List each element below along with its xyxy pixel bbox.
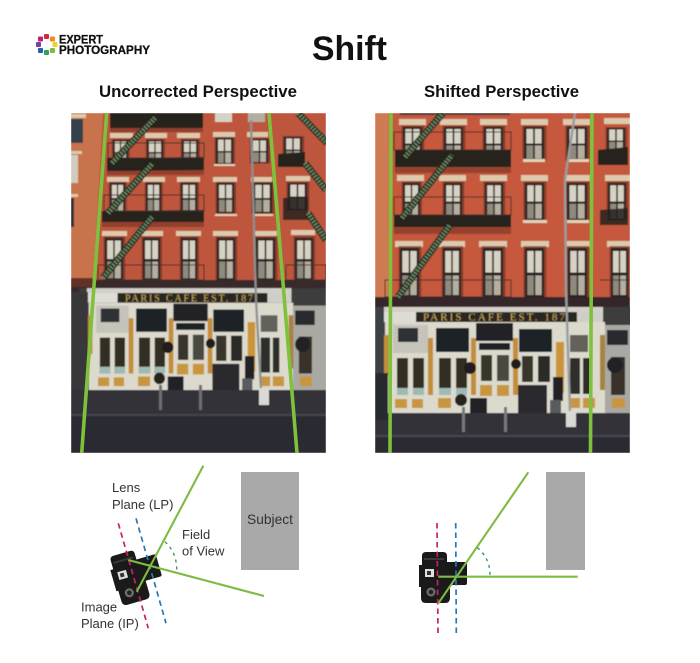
image plane dashed line: [118, 523, 148, 628]
icon: colour ring: [36, 34, 58, 55]
heading: uncorrected perspective: Uncorrected Perspective: [99, 82, 297, 101]
panel: uncorrected photo of Paris Cafe building: [71, 113, 327, 453]
image plane dashed line: [437, 523, 438, 633]
icon: tilted camera: [107, 544, 167, 607]
diagram: uncorrected camera setup: [81, 466, 299, 631]
label: lens plane: Plane (LP): [112, 497, 173, 512]
logo wordmark: [59, 32, 150, 57]
icon: straight camera: [419, 552, 467, 603]
field of view lines: [128, 466, 264, 596]
logo wordmark: PHOTOGRAPHY: [59, 43, 150, 57]
field of view arc: [165, 542, 177, 570]
lens plane dashed line: [455, 523, 457, 633]
perspective guide: parallel green lines: [390, 113, 592, 453]
label: field of view: Field: [182, 527, 210, 542]
field of view lines: [438, 472, 578, 603]
panel: shifted photo of Paris Cafe building: PARIS CAFE EST. 187: [423, 312, 566, 324]
subject block: [546, 472, 585, 570]
perspective guide: converging green lines: [82, 113, 297, 453]
label: field of view: of View: [182, 544, 225, 559]
heading: shifted perspective: Shifted Perspective: [424, 82, 579, 101]
field of view arc: [477, 548, 490, 575]
panel: shifted photo of Paris Cafe building: [375, 113, 640, 453]
label: image plane: Plane (IP): [81, 616, 139, 631]
label: lens plane: Lens: [112, 480, 140, 495]
title: Shift: [312, 30, 387, 68]
diagram: shifted camera setup: [419, 472, 585, 633]
logo wordmark: EXPERT: [59, 32, 104, 46]
subject block: [241, 472, 299, 570]
logo: Expert Photography: [36, 32, 150, 57]
subject block: Subject: [247, 511, 293, 527]
lens plane dashed line: [136, 518, 166, 623]
panel: uncorrected photo of Paris Cafe building: PARIS CAFE EST. 187: [125, 294, 253, 304]
label: image plane: Image: [81, 600, 117, 615]
